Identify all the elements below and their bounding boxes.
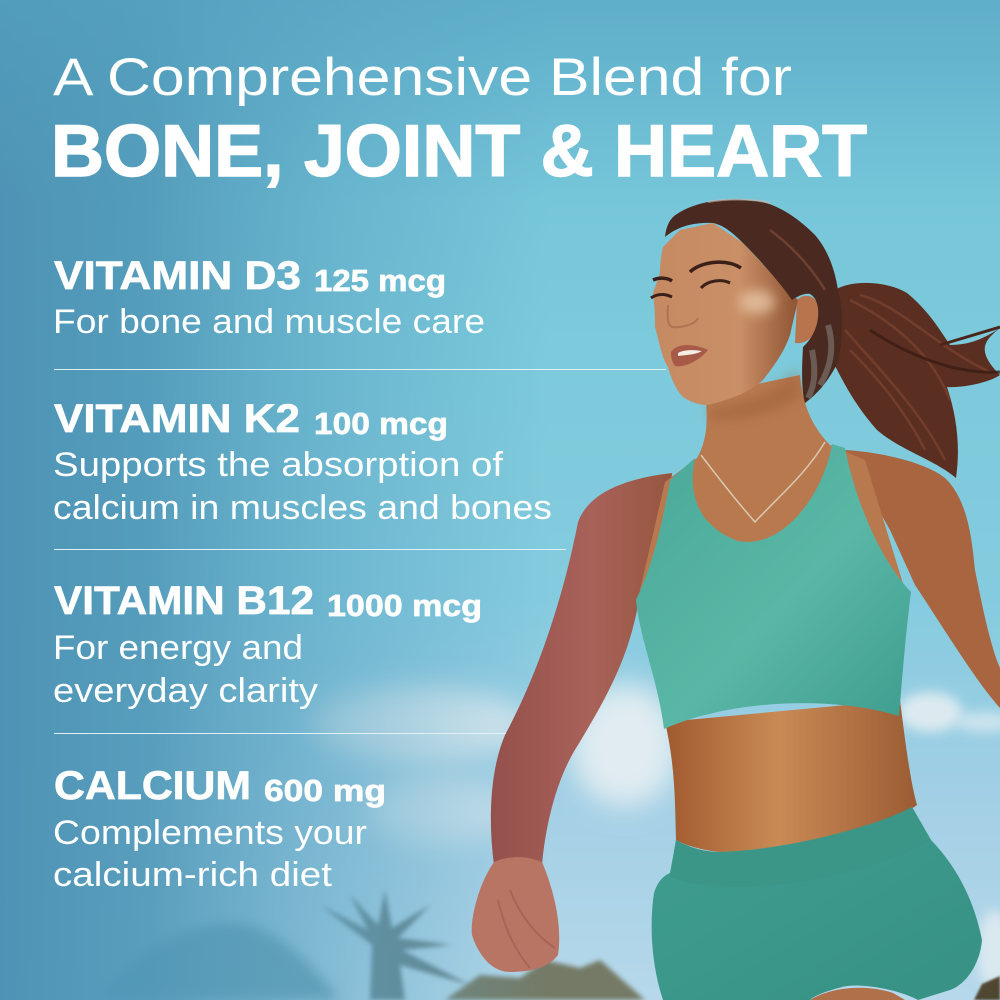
item: vitamin K2: calcium in muscles and bones (53, 489, 552, 527)
item: vitamin D3: For bone and muscle care (53, 303, 485, 341)
neck and chest (640, 375, 905, 590)
item: calcium: calcium-rich diet (53, 856, 333, 894)
waistband (670, 807, 931, 887)
item: vitamin D3 (53, 254, 485, 341)
item: calcium: CALCIUM (54, 764, 251, 808)
item: vitamin B12: everyday clarity (53, 672, 318, 710)
item: vitamin B12: For energy and (53, 629, 303, 667)
nose shadow (668, 305, 698, 327)
thigh (810, 988, 905, 1000)
crop top (636, 444, 911, 729)
necklace (701, 442, 825, 522)
abdomen (665, 700, 917, 852)
lips (671, 345, 708, 366)
finger lines (498, 890, 555, 968)
item: vitamin K2 (53, 397, 552, 527)
item: vitamin D3: 125 mcg (314, 263, 446, 298)
item: calcium (53, 764, 386, 894)
item: vitamin B12 (53, 579, 482, 710)
item: calcium: Complements your (53, 814, 367, 852)
ponytail (833, 283, 1000, 478)
hair (665, 200, 842, 403)
item: vitamin K2: Supports the absorption of (53, 446, 504, 484)
item: calcium: 600 mg (264, 773, 386, 808)
background: clouds (310, 683, 1000, 990)
item: vitamin D3: VITAMIN D3 (54, 254, 301, 298)
eyes and brows (651, 262, 741, 298)
face (653, 223, 798, 405)
item: vitamin B12: 1000 mcg (327, 588, 482, 623)
woman runner (472, 200, 1000, 1000)
item: vitamin K2: VITAMIN K2 (54, 397, 300, 441)
title line 1: A Comprehensive Blend for (53, 48, 792, 107)
shorts (652, 807, 982, 1000)
neck shadow (708, 370, 802, 420)
ear (795, 296, 820, 343)
title line 2: BONE, JOINT & HEART (51, 111, 867, 192)
item: vitamin K2: 100 mcg (314, 406, 448, 441)
item: vitamin B12: VITAMIN B12 (54, 579, 314, 623)
cheek highlight (739, 290, 775, 314)
fist (472, 857, 559, 972)
right arm and shoulder (845, 450, 1000, 708)
background: palm trees (100, 890, 1000, 1000)
left arm (491, 473, 672, 865)
